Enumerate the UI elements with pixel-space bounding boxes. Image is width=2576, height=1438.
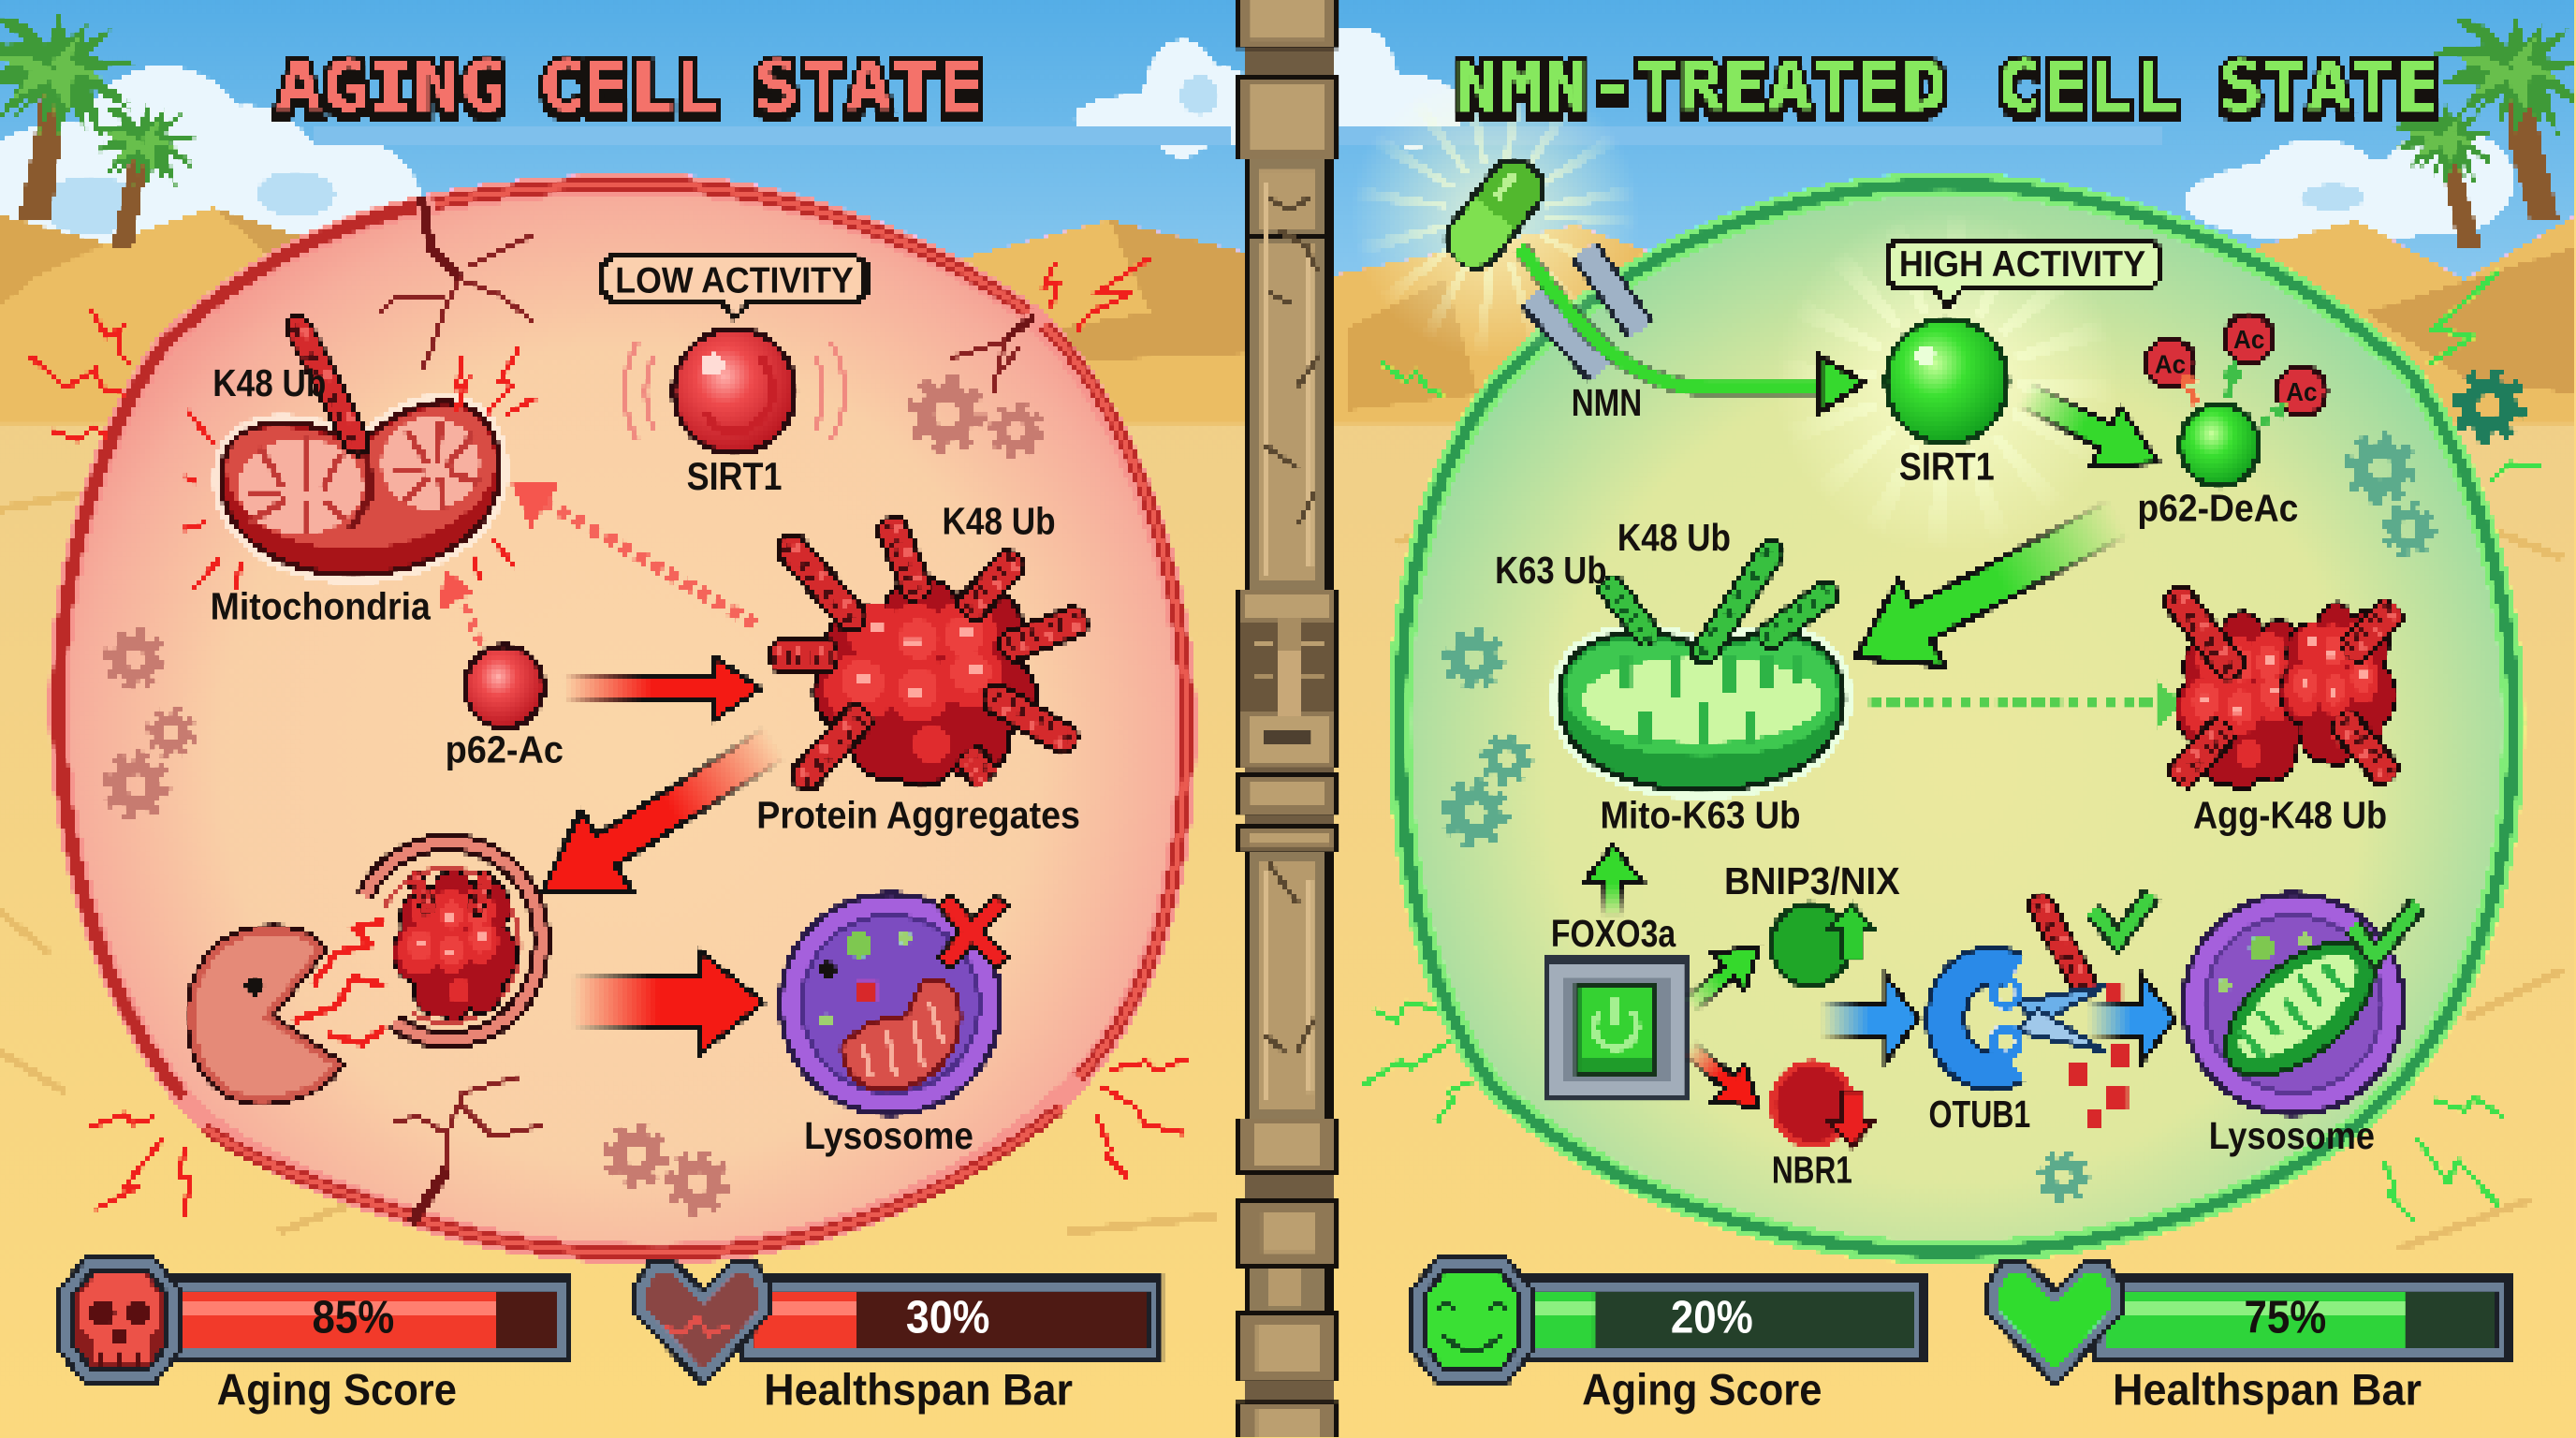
label: BNIP3/NIX: BNIP3/NIX — [1724, 859, 1900, 902]
label: healthspan bar treated: Healthspan Bar — [2113, 1366, 2422, 1416]
background: sand floor — [0, 424, 2576, 1438]
label: NMN: NMN — [1572, 381, 1642, 424]
background: sky — [0, 0, 2576, 345]
low activity bubble — [603, 257, 866, 318]
healthy heart — [1988, 1262, 2121, 1386]
label: K48 Ub aggregates: K48 Ub — [943, 499, 1056, 542]
label: acetyl left: Ac — [2155, 349, 2186, 378]
acetyl release arrows — [2180, 359, 2287, 424]
value: 75 percent: 75% — [2244, 1292, 2326, 1343]
BNIP3/NIX sphere — [1771, 903, 1876, 986]
SIRT1 sphere — [624, 329, 844, 453]
label: p62-DeAc: p62-DeAc — [2137, 486, 2298, 529]
arrow p62 to aggregates — [564, 657, 761, 720]
label: lysosome: Lysosome — [804, 1114, 973, 1157]
label: healthspan bar: Healthspan Bar — [764, 1366, 1073, 1416]
NBR1 sphere — [1773, 1064, 1876, 1147]
skull badge — [59, 1258, 181, 1384]
FOXO3a power switch — [1546, 960, 1686, 1099]
palm tree right small — [2378, 81, 2509, 250]
title: NMN-treated cell state: CELL — [1996, 48, 2180, 127]
ubiquitin chain on mitochondrion — [291, 321, 363, 444]
lysosome check mark — [2352, 903, 2419, 956]
dashed arrow p62 to mitochondria — [440, 567, 481, 644]
SIRT1 active sphere — [1886, 318, 2008, 444]
membrane energy lightning — [1362, 271, 2539, 1221]
title: NMN-treated cell state: STATE — [2218, 48, 2440, 127]
value: 85 percent: 85% — [312, 1292, 394, 1343]
pillar cracks — [1262, 198, 1321, 1051]
background: dither band — [312, 125, 2162, 146]
pillar totem face — [1240, 616, 1336, 762]
healthy mitochondrion — [1559, 633, 1844, 790]
arrow to lysosome — [2086, 976, 2175, 1062]
label: mitochondria: Mitochondria — [211, 585, 431, 628]
membrane cracks — [378, 198, 1035, 1225]
dotted arrow to aggregates — [1869, 681, 2185, 729]
arrow to OTUB1 — [1821, 976, 1919, 1062]
label: protein aggregates: Protein Aggregates — [756, 794, 1080, 837]
high activity bubble — [1888, 240, 2159, 307]
panel: NMN-treated cell — [1351, 69, 2539, 1252]
palm tree right large — [2416, 0, 2576, 220]
red X mark — [949, 907, 996, 956]
label: high activity: HIGH ACTIVITY — [1899, 244, 2145, 285]
ubiquitin chains on mitochondrion — [1603, 547, 1833, 657]
phagosome with cargo — [365, 843, 541, 1040]
title: aging cell state: STATE — [754, 48, 984, 127]
pillar collars — [1236, 0, 1340, 1438]
cell membrane — [59, 184, 1186, 1254]
background: clouds — [0, 26, 2513, 296]
pillar necks — [1244, 46, 1332, 1405]
active lysosome — [2184, 894, 2404, 1114]
aging score meter treated — [1412, 1258, 1927, 1384]
label: aging score: Aging Score — [217, 1366, 457, 1416]
title: aging cell state: CELL — [539, 48, 720, 127]
sparks pacman attack — [292, 920, 386, 1043]
label: NBR1: NBR1 — [1772, 1149, 1852, 1192]
arrow phagosome to lysosome — [572, 949, 764, 1055]
healthspan meter aging — [636, 1262, 1164, 1386]
degraded aggregate — [2169, 589, 2400, 792]
FOXO3a up arrow — [1586, 844, 1641, 917]
title: aging cell state: AGING — [276, 48, 506, 127]
failed lysosome — [781, 894, 1001, 1114]
title: aging cell state — [276, 48, 984, 127]
green check near rod — [2093, 894, 2152, 940]
label: aging score treated: Aging Score — [1582, 1366, 1822, 1416]
label: lysosome treated: Lysosome — [2209, 1114, 2375, 1157]
palm tree left large — [0, 0, 155, 220]
p62-DeAc sphere — [2180, 404, 2259, 487]
background: pale cloud shadows — [41, 76, 2365, 235]
title: NMN-treated cell state: NMN-TREATED — [1454, 48, 1947, 127]
label: OTUB1: OTUB1 — [1928, 1093, 2030, 1136]
central stone pillar — [1236, 0, 1340, 1438]
aging score meter — [59, 1258, 572, 1384]
cell body — [1399, 184, 2513, 1252]
pacman enzyme — [192, 932, 337, 1099]
membrane channel — [1531, 250, 1641, 372]
arrow SIRT1 to p62 — [2009, 365, 2174, 492]
label: low activity: LOW ACTIVITY — [615, 260, 854, 301]
label: K63 Ub: K63 Ub — [1495, 549, 1606, 592]
title: NMN-treated cell state — [1454, 48, 2440, 127]
NMN capsule — [1437, 150, 1554, 277]
label: FOXO3a: FOXO3a — [1551, 912, 1676, 955]
membrane stress lightning — [30, 258, 1186, 1216]
gears — [108, 381, 1040, 1211]
damaged heart — [636, 1262, 768, 1386]
protein aggregates — [773, 520, 1084, 788]
OTUB1 enzyme — [1946, 966, 2014, 1071]
scissors — [1993, 979, 2106, 1055]
outer gear — [2457, 374, 2521, 437]
gears — [1446, 438, 2432, 1198]
background: desert dunes — [0, 207, 2576, 460]
palm tree left small — [77, 82, 211, 246]
label: SIRT1: SIRT1 — [687, 454, 782, 498]
label: K48 Ub treated: K48 Ub — [1617, 516, 1731, 559]
text labels — [211, 244, 2422, 1416]
background: sand streaks — [0, 493, 2563, 1249]
pillar shafts — [1244, 159, 1332, 1314]
big arrow aggregates to phagosome — [517, 702, 801, 932]
label: p62-Ac: p62-Ac — [446, 727, 564, 770]
cell membrane — [1399, 184, 2513, 1252]
label: Agg-K48 Ub: Agg-K48 Ub — [2193, 794, 2387, 837]
label: SIRT1 treated: SIRT1 — [1899, 444, 1995, 488]
membrane highlight — [204, 184, 1186, 1254]
big arrow p62 to mitochondrion — [1832, 474, 2143, 701]
acetyl groups — [2145, 314, 2326, 416]
label: acetyl right: Ac — [2286, 377, 2318, 406]
label: Mito-K63 Ub: Mito-K63 Ub — [1600, 794, 1801, 837]
label: acetyl top: Ac — [2233, 325, 2264, 354]
ubiquitin rod being cut — [2033, 898, 2092, 991]
value: 30 percent: 30% — [906, 1292, 989, 1343]
healthspan meter treated — [1988, 1262, 2512, 1386]
smile badge — [1412, 1258, 1533, 1384]
SIRT1 glow rays — [1775, 209, 2119, 553]
damaged mitochondrion — [222, 403, 500, 575]
arrow to BNIP3 — [1673, 928, 1775, 1024]
label: K48 Ub mitochondria: K48 Ub — [212, 361, 326, 404]
panel: aging cell — [30, 184, 1186, 1254]
cut ubiquitin fragments — [2070, 983, 2130, 1129]
cell body — [59, 184, 1186, 1254]
value: 20 percent: 20% — [1671, 1292, 1753, 1343]
arrow to NBR1 — [1673, 1030, 1775, 1126]
stress sparks near mitochondrion — [184, 348, 535, 592]
pill glow rays — [1351, 69, 1640, 359]
dashed arrow aggregates to mitochondria — [511, 481, 755, 624]
NMN flow arrow — [1519, 246, 1865, 413]
p62-Ac sphere — [465, 646, 544, 728]
